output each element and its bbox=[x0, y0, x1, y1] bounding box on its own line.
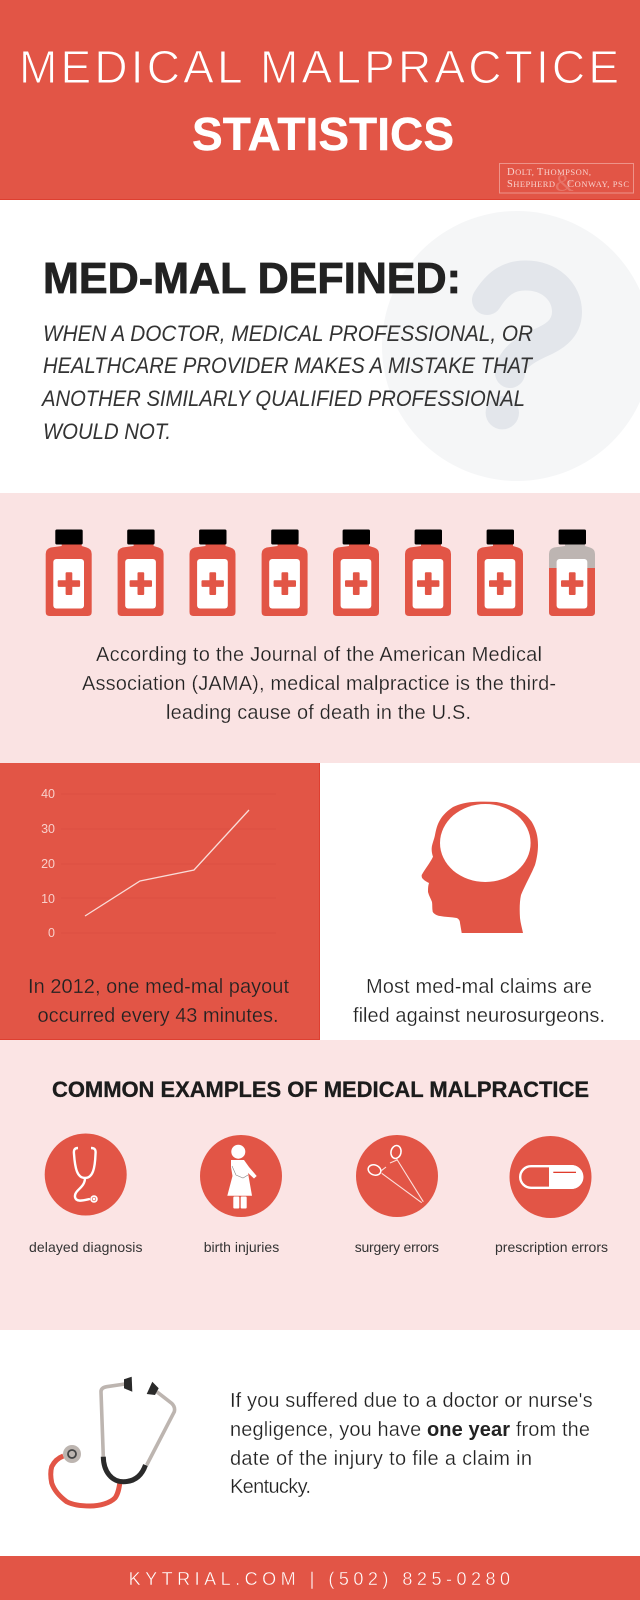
text: neurosurgeons statement: Most med-mal claims are bbox=[366, 976, 592, 998]
icon: bottle 6 bbox=[405, 530, 451, 616]
text: JAMA statement: According to the Journal of the American Medical bbox=[96, 644, 542, 666]
text: JAMA statement bbox=[82, 644, 556, 724]
line chart bbox=[41, 787, 276, 940]
text: one year notice: negligence, you have one year from the bbox=[230, 1419, 590, 1441]
panel: definition bbox=[40, 211, 640, 481]
icon: stethoscope bbox=[45, 1134, 127, 1216]
icon: bottle 5 bbox=[333, 530, 379, 616]
logo: law firm: CONWAY, PSC bbox=[567, 179, 629, 190]
label: birth injuries bbox=[204, 1239, 279, 1255]
icon: bottle 4 bbox=[262, 530, 308, 616]
text: definition: WOULD NOT. bbox=[43, 419, 171, 444]
icon: bottle 1 bbox=[46, 530, 92, 616]
text: one year notice: Kentucky. bbox=[230, 1476, 311, 1498]
logo: law firm: DOLT, THOMPSON, bbox=[507, 167, 591, 178]
title: medical malpractice: MEDICAL MALPRACTICE bbox=[19, 41, 619, 93]
line chart: 10 bbox=[41, 892, 55, 906]
logo: law firm: & bbox=[555, 171, 574, 197]
title: statistics: STATISTICS bbox=[192, 108, 454, 160]
label: delayed diagnosis bbox=[29, 1239, 142, 1255]
item: birth injuries bbox=[200, 1135, 282, 1255]
panel: neurosurgeons bbox=[353, 802, 605, 1027]
panel: payout line chart bbox=[0, 763, 320, 1040]
panel: one year notice bbox=[51, 1377, 593, 1506]
line chart: 20 bbox=[41, 857, 55, 871]
text: JAMA statement: leading cause of death in the U.S. bbox=[166, 702, 471, 724]
panel: JAMA statistic bbox=[0, 493, 640, 763]
text: definition bbox=[40, 321, 533, 444]
item: delayed diagnosis bbox=[29, 1134, 142, 1255]
text: payout statement: In 2012, one med-mal payout bbox=[28, 976, 289, 998]
line chart: 30 bbox=[41, 822, 55, 836]
heading: common examples: COMMON EXAMPLES OF MEDICAL MALPRACTICE bbox=[52, 1077, 589, 1102]
text: definition: ANOTHER SIMILARLY QUALIFIED PROFESSIONAL bbox=[40, 386, 525, 411]
logo: law firm bbox=[500, 164, 634, 197]
icon: large stethoscope bbox=[51, 1377, 175, 1506]
line chart: 40 bbox=[41, 787, 55, 801]
icon: bottle 3 bbox=[190, 530, 236, 616]
text: one year notice bbox=[230, 1390, 593, 1498]
icon: forceps bbox=[356, 1135, 438, 1217]
text: JAMA statement: Association (JAMA), medical malpractice is the third- bbox=[82, 673, 556, 695]
text: one year notice: If you suffered due to a doctor or nurse's bbox=[230, 1390, 593, 1412]
text: one year notice: date of the injury to file a claim in bbox=[230, 1448, 532, 1470]
label: prescription errors bbox=[495, 1239, 608, 1255]
text: neurosurgeons statement bbox=[353, 976, 605, 1027]
item: prescription errors bbox=[495, 1136, 608, 1255]
icon: woman bbox=[200, 1135, 282, 1217]
heading: med-mal defined: MED-MAL DEFINED: bbox=[43, 254, 461, 303]
item: surgery errors bbox=[355, 1135, 439, 1255]
footer: contact: KYTRIAL.COM | (502) 825-0280 bbox=[129, 1569, 510, 1589]
logo: law firm: SHEPHERD bbox=[507, 179, 555, 190]
label: surgery errors bbox=[355, 1239, 439, 1255]
icon: bottle 2 bbox=[118, 530, 164, 616]
text: definition: WHEN A DOCTOR, MEDICAL PROFESSIONAL, OR bbox=[43, 321, 533, 346]
icon: question mark in circle bbox=[382, 211, 640, 481]
icon: bottle 7 bbox=[477, 530, 523, 616]
footer: contact bbox=[0, 1556, 640, 1600]
panel: header bbox=[0, 0, 640, 200]
text: payout statement bbox=[28, 976, 289, 1027]
text: payout statement: occurred every 43 minutes. bbox=[38, 1005, 278, 1027]
icon: head silhouette bbox=[422, 802, 538, 933]
icon: pill bbox=[510, 1136, 592, 1218]
icon: bottle 8 partly filled bbox=[549, 530, 595, 616]
text: definition: HEALTHCARE PROVIDER MAKES A MISTAKE THAT bbox=[43, 353, 533, 378]
line chart: 0 bbox=[48, 926, 55, 940]
panel: common examples bbox=[0, 1040, 640, 1330]
text: neurosurgeons statement: filed against neurosurgeons. bbox=[353, 1005, 605, 1027]
